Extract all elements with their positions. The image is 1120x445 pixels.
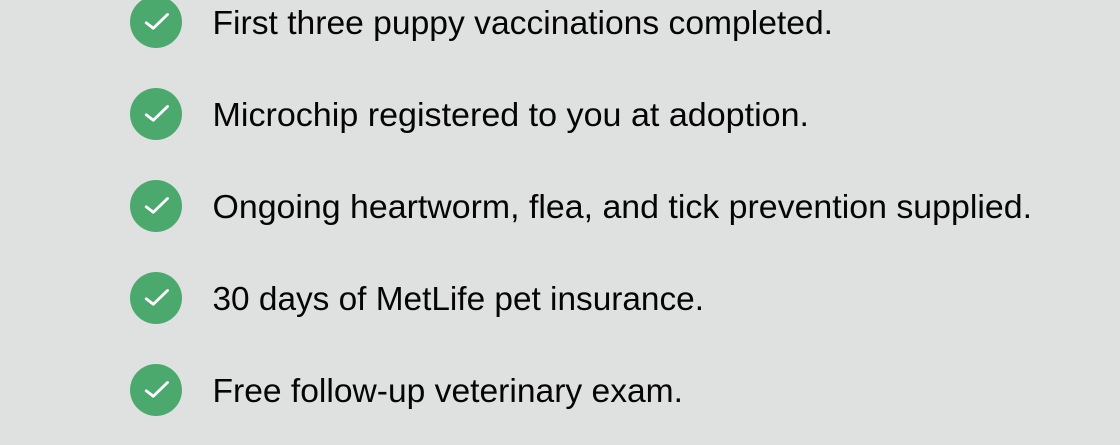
checklist item: microchip: [130, 88, 809, 140]
checklist item: vaccinations: [130, 0, 833, 48]
icon: green check circle: [130, 364, 182, 416]
icon: green check circle: [130, 180, 182, 232]
text: prevention: Ongoing heartworm, flea, and tick prevention supplied.: [212, 188, 1032, 225]
checklist item: prevention: [130, 180, 1032, 232]
icon: green check circle: [130, 0, 182, 48]
checklist item: insurance: [130, 272, 704, 324]
text: insurance: 30 days of MetLife pet insurance.: [212, 280, 704, 317]
icon: green check circle: [130, 88, 182, 140]
text: exam: Free follow-up veterinary exam.: [212, 372, 683, 409]
checklist item: exam: [130, 364, 683, 416]
text: vaccinations: First three puppy vaccinations completed.: [212, 4, 833, 41]
icon: green check circle: [130, 272, 182, 324]
text: microchip: Microchip registered to you at adoption.: [212, 96, 809, 133]
